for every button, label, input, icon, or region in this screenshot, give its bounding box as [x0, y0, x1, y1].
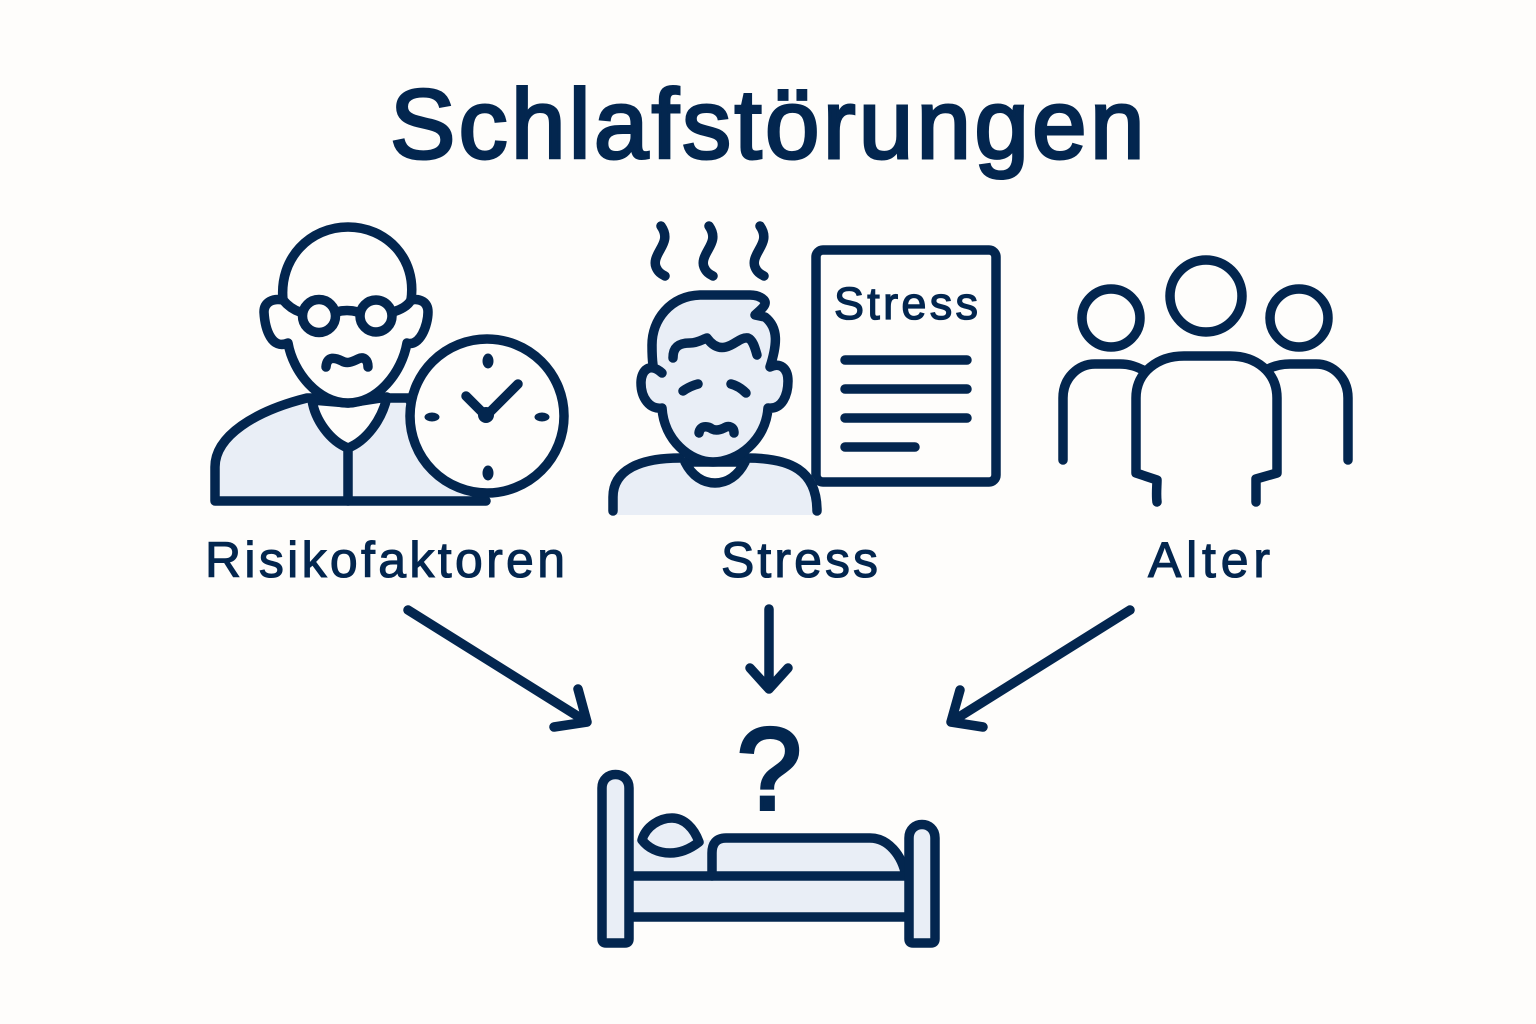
arrow: right: [951, 610, 1130, 727]
pillow: [642, 818, 699, 853]
clock: [410, 339, 564, 493]
person body: [613, 458, 817, 515]
right person: [1268, 289, 1348, 460]
collar: [312, 397, 387, 448]
title: Schlafstörungen: [390, 69, 1146, 179]
arrow: left: [408, 610, 587, 727]
old man body: [215, 398, 486, 501]
glasses: [302, 300, 392, 332]
eyebrows: [683, 384, 746, 393]
label: Risikofaktoren: Risikofaktoren: [205, 532, 565, 588]
stress document: Stress: [834, 278, 978, 329]
center person: [1136, 260, 1277, 502]
blanket: [712, 838, 906, 876]
mattress: [629, 876, 909, 917]
person head: [641, 295, 788, 462]
old man head: [264, 227, 428, 403]
question mark: ?: [737, 704, 802, 834]
left post: [602, 774, 629, 943]
icon: older man with clock: [215, 227, 564, 501]
bed rails: [629, 876, 909, 917]
hair line: [673, 338, 757, 358]
steam lines: [655, 226, 764, 276]
icon: group of three people: [1063, 260, 1348, 502]
left person: [1063, 289, 1143, 460]
arrow: middle: [750, 609, 788, 689]
neck collar: [685, 462, 745, 483]
right post: [909, 824, 935, 943]
mouth: [326, 358, 368, 367]
icon: bed: [602, 774, 935, 943]
label: Stress: Stress: [721, 532, 878, 588]
stress document: [816, 250, 996, 482]
label: Alter: Alter: [1148, 532, 1270, 588]
mouth: [699, 427, 734, 433]
space under pillow: [633, 840, 713, 876]
icon: stressed person with document: [613, 226, 996, 515]
